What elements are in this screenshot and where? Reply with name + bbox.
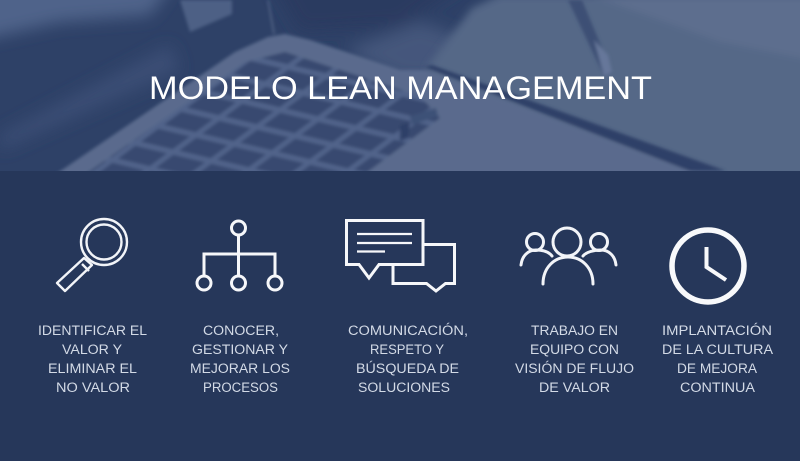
text: conocer: GESTIONAR Y [192,342,288,357]
text: implantacion: IMPLANTACIÓN [662,323,772,338]
icon: magnifying glass [57,219,127,291]
laptop body [58,32,683,171]
column 1: identificar valor [38,219,148,395]
text: comunicacion: COMUNICACIÓN, [348,323,468,338]
text: conocer [190,323,290,395]
text: trabajo: EQUIPO CON [530,342,619,357]
text: identificar: IDENTIFICAR EL [38,323,148,338]
text: implantacion: CONTINUA [680,380,755,395]
text: conocer: PROCESOS [203,380,278,395]
icon: team of people [521,228,616,284]
text: trabajo: TRABAJO EN [531,323,618,338]
column 3: comunicacion [346,220,468,395]
text: trabajo: VISIÓN DE FLUJO [515,361,634,376]
screen detail [180,0,232,32]
column 2: procesos [190,221,290,395]
text: comunicacion: BÚSQUEDA DE [356,361,459,376]
text: comunicacion [348,323,468,395]
text: identificar: VALOR Y [62,342,122,357]
notebook sheet and desk [430,0,800,171]
icon: process hierarchy [197,221,282,290]
text: comunicacion: RESPETO Y [370,342,444,357]
text: trabajo [515,323,634,395]
text: implantacion [662,323,773,395]
pen [568,0,601,68]
icon: speech bubbles [346,220,454,291]
text: implantacion: DE LA CULTURA [662,342,773,357]
column 4: trabajo en equipo [515,228,634,395]
text: conocer: CONOCER, [203,323,279,338]
text: implantacion: DE MEJORA [677,361,757,376]
text: identificar: ELIMINAR EL [48,361,138,376]
small clip [410,108,438,125]
column 5: mejora continua [662,230,773,395]
text: conocer: MEJORAR LOS [190,361,290,376]
text: identificar: NO VALOR [56,380,130,395]
text: identificar [38,323,148,395]
title: MODELO LEAN MANAGEMENT [149,70,652,106]
text: trabajo: DE VALOR [539,380,610,395]
icon: clock [672,230,744,302]
text: comunicacion: SOLUCIONES [358,380,450,395]
header photo: laptop and notebook [0,0,800,190]
notebook edge [425,65,726,171]
